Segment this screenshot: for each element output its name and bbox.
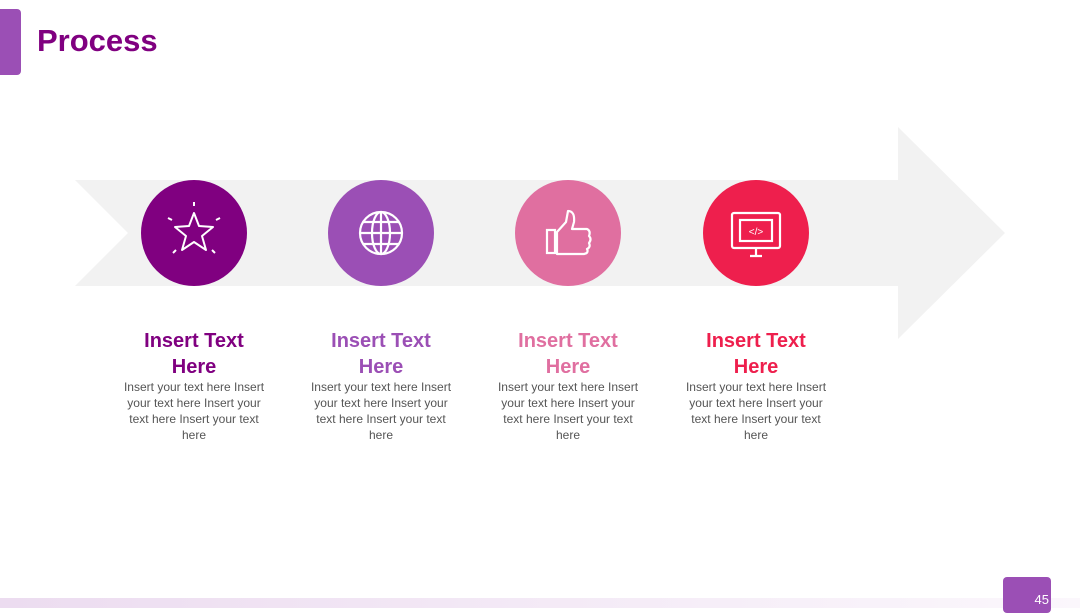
step 1: Here: [172, 356, 216, 378]
page number: 45: [1035, 592, 1049, 607]
step 4: [686, 330, 826, 442]
bottom gradient strip: [0, 598, 1080, 608]
title accent bar: [0, 9, 21, 75]
step 3: Insert your text here Insert your text here Insert your text here Insert your text here: [498, 380, 638, 442]
page number: [1003, 577, 1051, 613]
step 3: Insert Text: [518, 330, 618, 352]
icon: code monitor: </>: [749, 227, 763, 238]
step 4: Insert Text: [706, 330, 806, 352]
icon: star: [141, 180, 247, 286]
step 2: Here: [359, 356, 403, 378]
title: Process: [37, 23, 158, 58]
step 2: Insert your text here Insert your text here Insert your text here Insert your text here: [311, 380, 451, 442]
icon: code monitor: [703, 180, 809, 286]
step 2: Insert Text: [331, 330, 431, 352]
step 1: Insert Text: [144, 330, 244, 352]
step 1: [124, 330, 264, 442]
icon: globe: [328, 180, 434, 286]
step 3: [498, 330, 638, 442]
step 1: Insert your text here Insert your text here Insert your text here Insert your text here: [124, 380, 264, 442]
icon: thumbs up: [515, 180, 621, 286]
step 2: [311, 330, 451, 442]
step 4: Insert your text here Insert your text here Insert your text here Insert your text here: [686, 380, 826, 442]
step 4: Here: [734, 356, 778, 378]
arrow shape: [75, 127, 1005, 339]
step 3: Here: [546, 356, 590, 378]
